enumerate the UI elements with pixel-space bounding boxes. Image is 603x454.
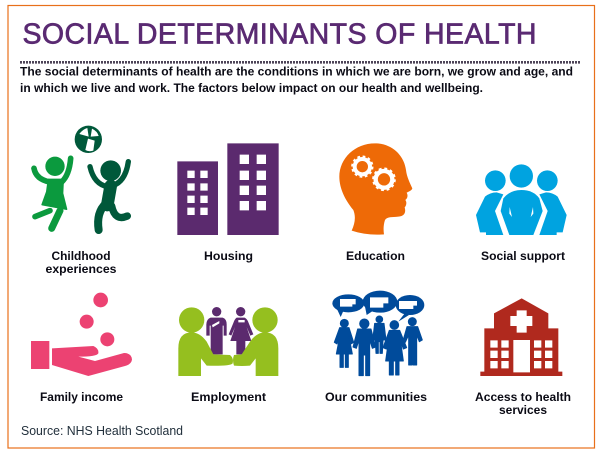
label: childhood experiences bbox=[46, 249, 117, 276]
intro text bbox=[20, 64, 573, 95]
label: childhood experiences: experiences bbox=[46, 262, 117, 276]
staff figures bbox=[206, 307, 253, 354]
girl bbox=[34, 157, 71, 228]
label: our communities: Our communities bbox=[325, 390, 427, 404]
source note: Source: NHS Health Scotland bbox=[21, 424, 183, 438]
label: access to health services: Access to health bbox=[475, 390, 571, 404]
intro text: in which we live and work. The factors below impact on our health and wellbeing. bbox=[20, 81, 483, 95]
ball bbox=[75, 126, 102, 153]
icon: hospital building bbox=[480, 298, 562, 376]
label: access to health services: services bbox=[499, 403, 547, 417]
icon: hand receiving coins bbox=[31, 293, 132, 376]
label: childhood experiences: Childhood bbox=[52, 249, 110, 263]
label: employment: Employment bbox=[191, 390, 266, 404]
label: access to health services bbox=[475, 390, 571, 417]
boy bbox=[90, 160, 128, 230]
speech bubbles bbox=[332, 291, 424, 322]
people bbox=[334, 316, 422, 376]
label: social support: Social support bbox=[481, 249, 565, 263]
icon: employment handshake bbox=[178, 307, 278, 376]
intro text: The social determinants of health are the conditions in which we are born, we grow and age, and bbox=[20, 64, 573, 78]
handshake people bbox=[178, 307, 278, 376]
label: housing: Housing bbox=[204, 249, 253, 263]
icon: head with gears bbox=[339, 143, 412, 235]
title: SOCIAL DETERMINANTS OF HEALTH bbox=[22, 18, 536, 50]
icon: social support group bbox=[476, 164, 567, 235]
icon: community people with speech bubbles bbox=[332, 291, 424, 376]
icon: children playing with ball bbox=[34, 126, 128, 230]
label: family income: Family income bbox=[40, 390, 123, 404]
icon: housing buildings bbox=[177, 143, 279, 235]
label: education: Education bbox=[346, 249, 405, 263]
